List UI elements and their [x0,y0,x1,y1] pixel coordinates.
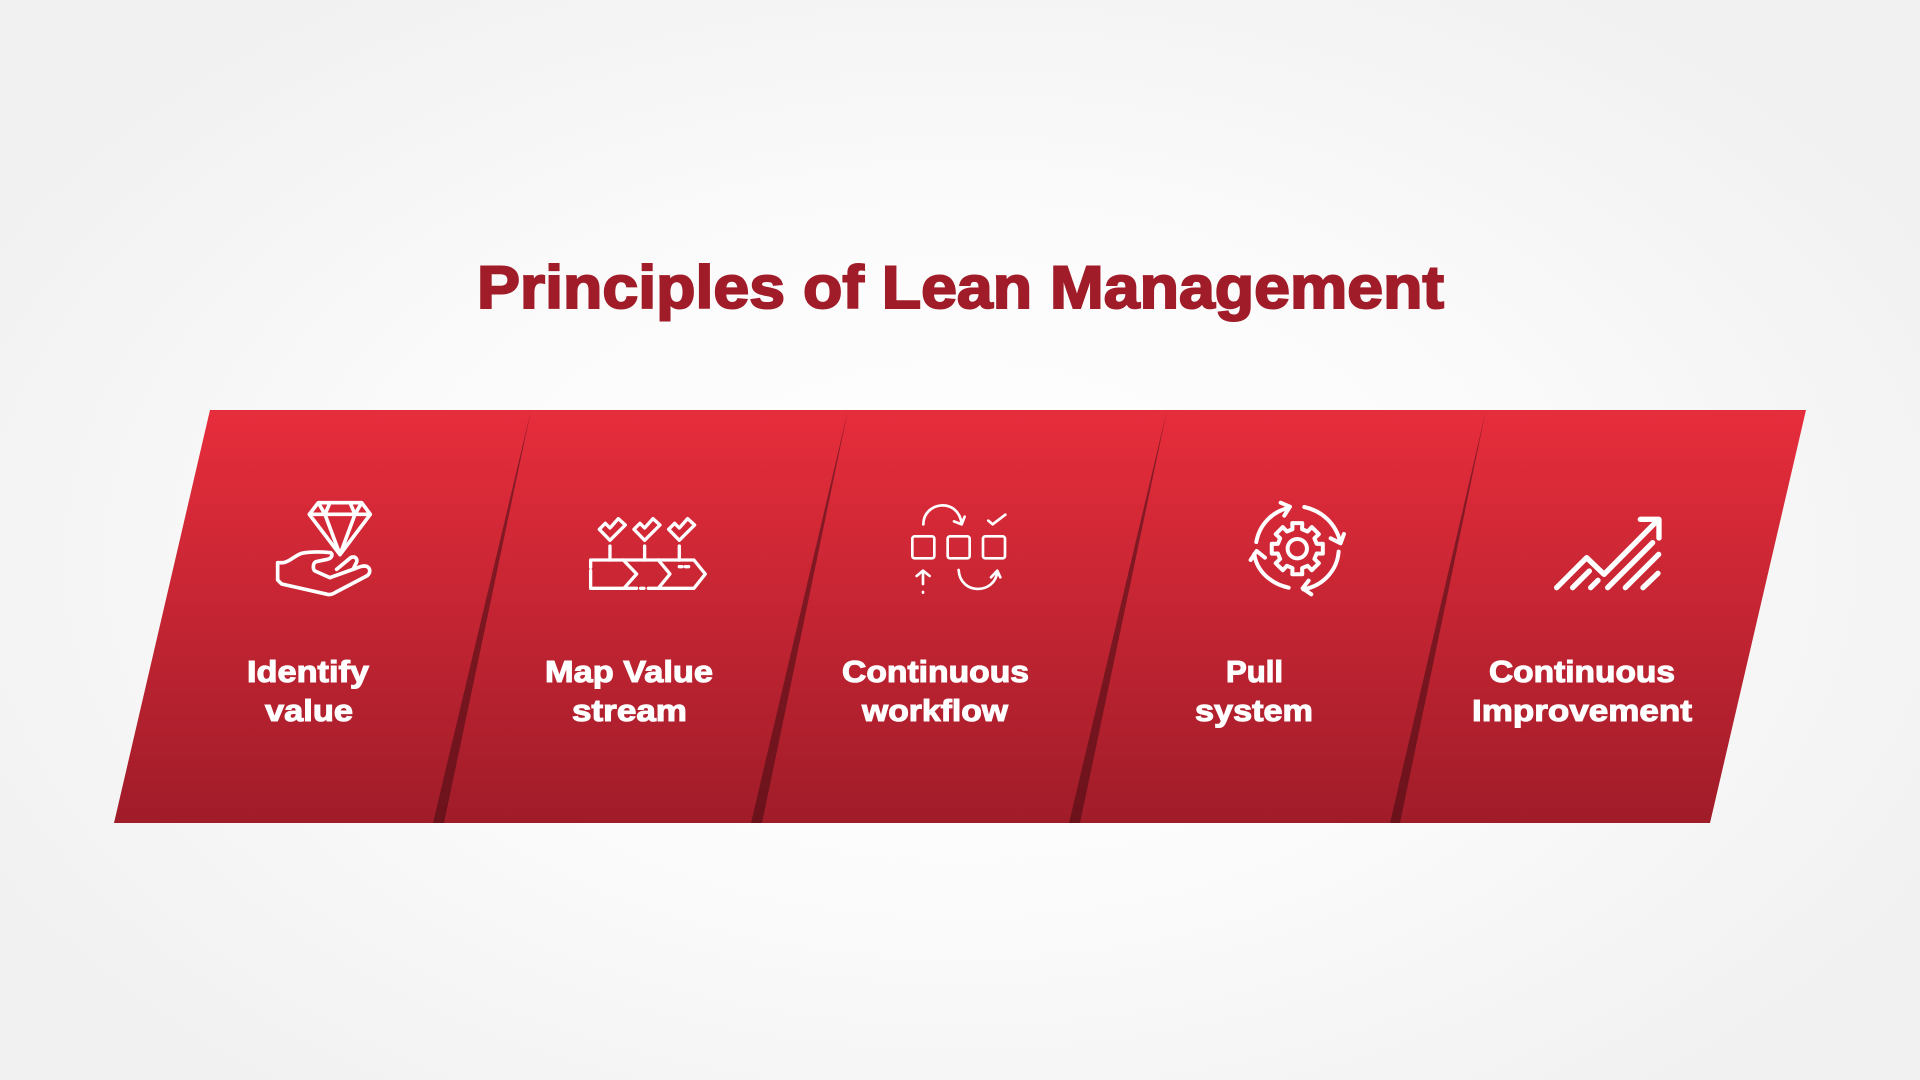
label: Map Value stream [545,654,713,728]
divider wedge 4 [1390,410,1486,823]
label: Continuous workflow: Continuous [842,654,1029,689]
label: Pull system [1195,654,1313,728]
icon: pull system gear [1251,503,1344,594]
label: Continuous workflow [842,654,1029,728]
label: Continuous workflow: workflow [861,693,1009,728]
divider wedge 1 [433,410,531,823]
label: Identify value: value [265,693,353,728]
label: Continuous Improvement: Continuous [1489,654,1675,689]
label: Pull system: system [1195,693,1313,728]
divider wedge 2 [751,410,848,823]
title: Principles of Lean Management [477,254,1444,321]
label: Identify value: Identify [247,654,370,689]
icon: hand holding diamond [278,503,370,595]
icon: growth chart [1557,519,1659,588]
label: Map Value stream: Map Value [545,654,713,689]
panel: parallelogram band [114,410,1806,823]
label: Continuous Improvement [1472,654,1692,728]
divider wedge 3 [1069,410,1167,823]
icon: continuous workflow [912,505,1005,593]
label: Continuous Improvement: Improvement [1472,693,1692,728]
label: Identify value [247,654,370,728]
label: Map Value stream: stream [572,693,687,728]
icon: value stream map [591,519,705,588]
label: Pull system: Pull [1226,654,1283,689]
